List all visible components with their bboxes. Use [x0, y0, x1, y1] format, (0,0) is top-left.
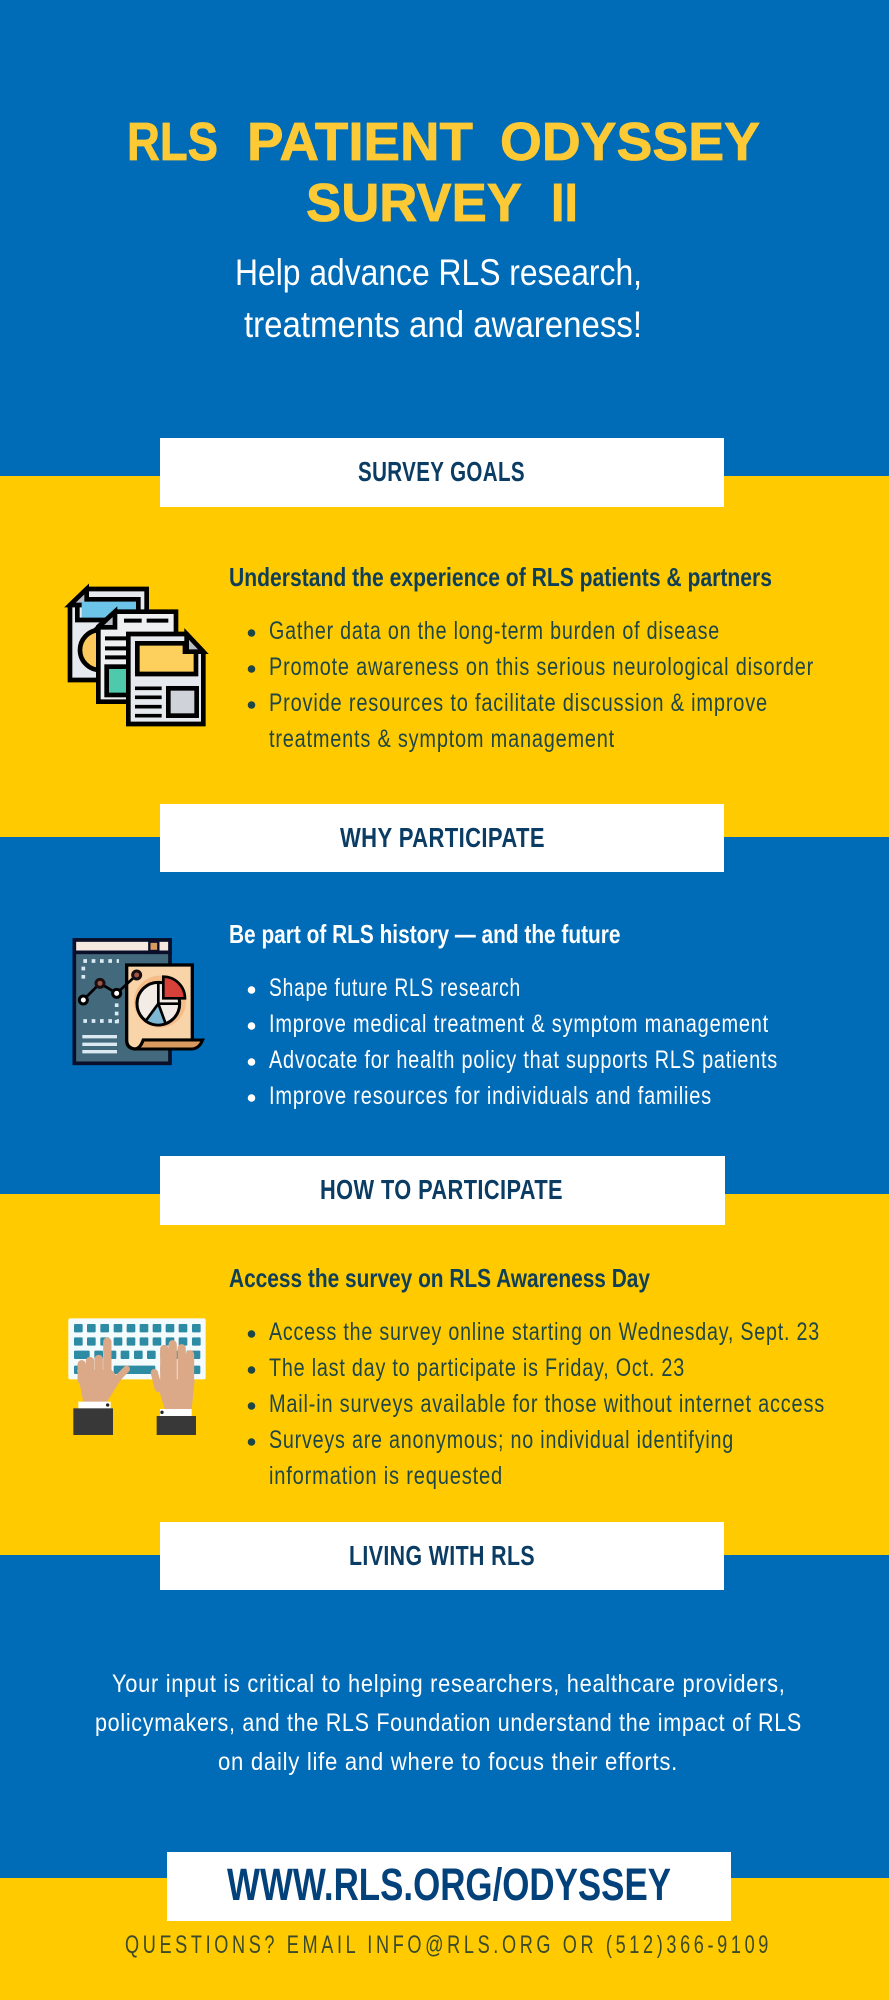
bullet list: Shape future RLS research	[269, 974, 521, 1002]
section heading: Understand the experience of RLS patients & partners	[229, 562, 772, 592]
panel: why participate	[0, 804, 889, 1194]
paragraph	[95, 1670, 802, 1776]
bullet list: information is requested	[269, 1462, 503, 1490]
panel: survey goals	[0, 438, 889, 837]
bullet list: Gather data on the long-term burden of disease	[269, 617, 720, 645]
icon: stacked documents	[70, 589, 203, 724]
icon: charts and report	[74, 940, 203, 1063]
bullet list: treatments & symptom management	[269, 725, 615, 753]
subtitle: Help advance RLS research,	[235, 252, 642, 293]
heading banner: survey goals: SURVEY GOALS	[358, 456, 525, 487]
panel: footer	[0, 1852, 889, 2000]
section heading: Be part of RLS history — and the future	[229, 919, 620, 949]
panel: how to participate	[0, 1156, 889, 1555]
bullet list: Improve medical treatment & symptom management	[269, 1010, 769, 1038]
heading banner: why participate: WHY PARTICIPATE	[340, 822, 545, 853]
title: RLS	[127, 112, 218, 172]
bullet list	[248, 617, 814, 753]
title: II	[551, 173, 578, 233]
bullet list: The last day to participate is Friday, Oct. 23	[269, 1354, 685, 1382]
bullet list: Improve resources for individuals and families	[269, 1082, 712, 1110]
heading banner: living with RLS	[160, 1522, 724, 1590]
call to action: website: WWW.RLS.ORG/ODYSSEY	[227, 1859, 671, 1910]
title: SURVEY	[306, 173, 522, 233]
subtitle	[235, 252, 642, 345]
call to action: website	[167, 1852, 731, 1921]
panel: header	[0, 0, 889, 476]
subtitle: treatments and awareness!	[244, 304, 642, 345]
title	[127, 112, 760, 233]
bullet list	[248, 974, 778, 1110]
bullet list: Provide resources to facilitate discussion & improve	[269, 689, 768, 717]
heading banner: how to participate: HOW TO PARTICIPATE	[320, 1174, 563, 1205]
title: PATIENT	[247, 112, 473, 172]
heading banner: living with RLS: LIVING WITH RLS	[349, 1540, 535, 1571]
icon: hands on keyboard	[68, 1318, 206, 1435]
bullet list: Surveys are anonymous; no individual identifying	[269, 1426, 734, 1454]
heading banner: survey goals	[160, 438, 724, 507]
heading banner: why participate	[160, 804, 724, 872]
panel: living with RLS	[0, 1522, 889, 1878]
title: ODYSSEY	[500, 112, 760, 172]
section heading: Access the survey on RLS Awareness Day	[229, 1263, 650, 1293]
bullet list	[248, 1318, 825, 1490]
paragraph: on daily life and where to focus their efforts.	[218, 1748, 678, 1776]
heading banner: how to participate	[160, 1156, 725, 1225]
paragraph: Your input is critical to helping researchers, healthcare providers,	[112, 1670, 786, 1698]
